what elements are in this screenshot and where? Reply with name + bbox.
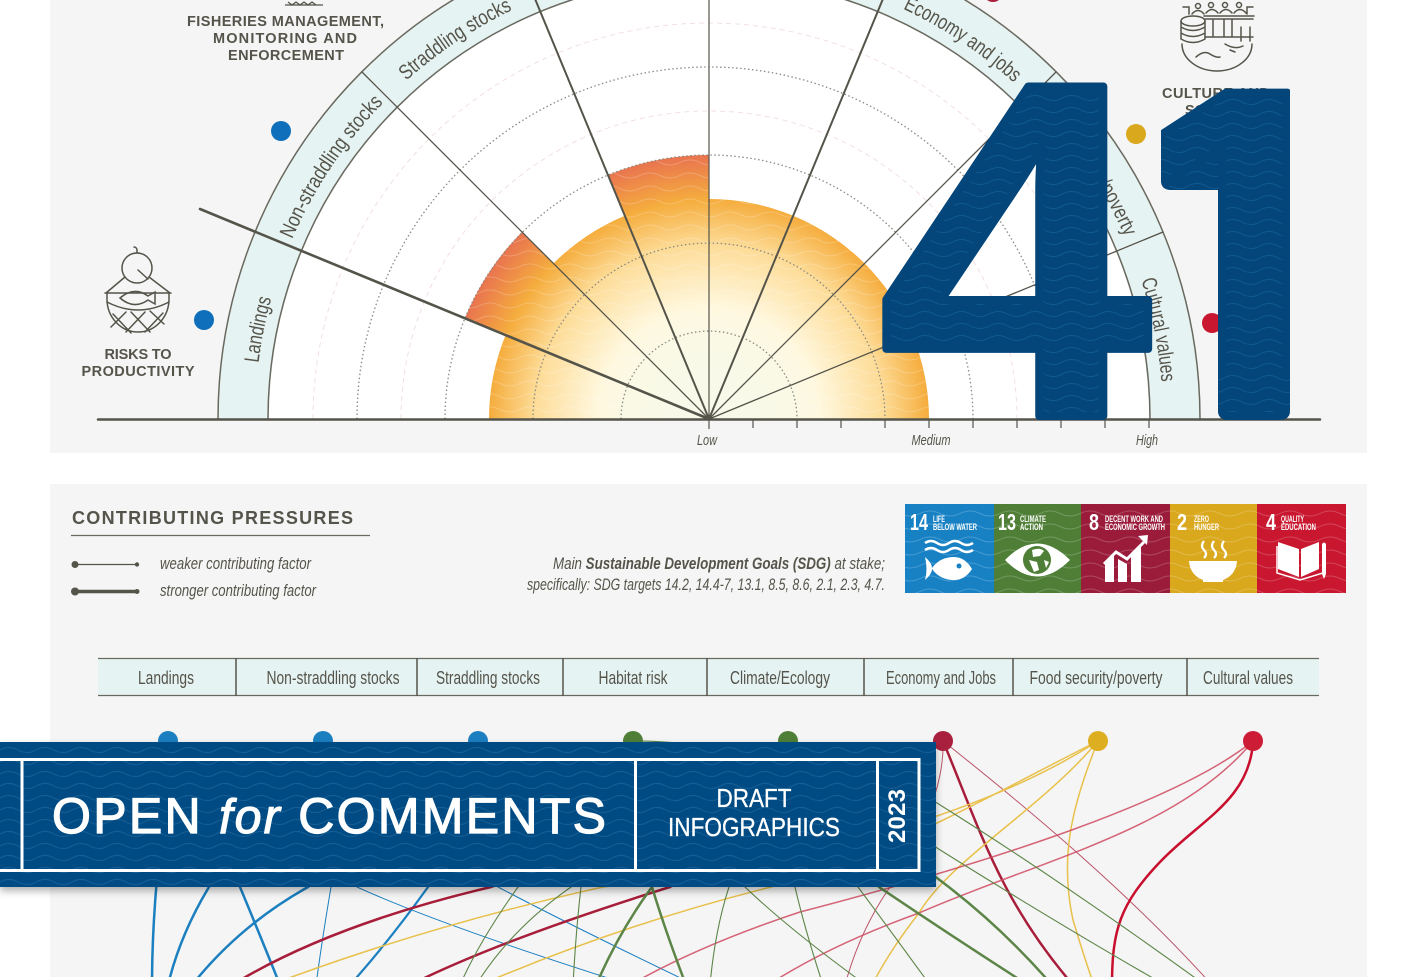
icon: risks to productivity [105, 247, 171, 333]
big number: 41 [882, 82, 1290, 420]
icon: fisheries management [285, 2, 323, 5]
table header: pressure categories: Habitat risk [598, 668, 668, 688]
heading: contributing pressures: CONTRIBUTING PRESSURES [72, 508, 353, 528]
ring labels: Landings [244, 296, 273, 362]
tile: SDG 4: QUALITY [1281, 514, 1304, 524]
axis labels: Low [697, 432, 718, 449]
tile: SDG 13: 13 [998, 509, 1016, 535]
heading: fisheries management [187, 14, 384, 64]
SDG tiles [905, 504, 1346, 593]
ring labels [244, 0, 1174, 382]
node: landings [158, 731, 178, 751]
blue links [152, 741, 695, 977]
tile: SDG 14: BELOW WATER [933, 522, 977, 532]
axis labels: High [1136, 432, 1158, 449]
spokes [200, 0, 1163, 419]
tile: SDG 2 [1170, 504, 1257, 593]
dot: cultural values [1202, 313, 1222, 333]
table header: pressure categories: Climate/Ecology [730, 668, 830, 688]
tile: SDG 4: EDUCATION [1281, 522, 1316, 532]
network lines [152, 741, 1253, 977]
heading: fisheries management: MONITORING AND [213, 31, 357, 47]
panel: risk rose chart [50, 0, 1367, 453]
banner subtitle [668, 783, 840, 842]
dot: economy [983, 0, 1003, 2]
banner subtitle: DRAFT [716, 783, 792, 813]
banner frame [0, 760, 919, 870]
tile: SDG 2: ZERO [1194, 514, 1209, 524]
tile: SDG 14: LIFE [933, 514, 945, 524]
tile: SDG 8: ECONOMIC GROWTH [1105, 522, 1165, 532]
table header: pressure categories: Non-straddling stocks [266, 668, 400, 688]
axis labels [697, 432, 1158, 449]
text: SDG note: specifically: SDG targets 14.2, 14.4-7, 13.1, 8.5, 8.6, 2.1, 2.3, 4.7. [527, 575, 885, 594]
tile: SDG 13 [994, 504, 1081, 593]
table header: pressure categories: Landings [138, 668, 194, 688]
heading: culture and society: CULTURE AND [1162, 86, 1270, 102]
text: SDG note [527, 554, 885, 594]
legend: stronger factor: stronger contributing factor [160, 581, 317, 600]
heading: risks to productivity: PRODUCTIVITY [82, 364, 195, 380]
tile: SDG 2: 2 [1177, 509, 1187, 535]
gold links [270, 741, 1098, 977]
tile: SDG 4 [1257, 504, 1346, 593]
banner title: OPEN for COMMENTS [52, 788, 606, 844]
icon: culture and society [1181, 2, 1254, 71]
big number: 41: 1 [1113, 0, 1374, 516]
node: food security [1088, 731, 1108, 751]
sun wedges [465, 155, 929, 419]
node: economy [933, 731, 953, 751]
panel: contributing pressures [50, 484, 1367, 977]
heading: culture and society [1162, 86, 1270, 119]
node: habitat risk [623, 731, 643, 751]
table header: pressure categories: Cultural values [1203, 668, 1293, 688]
heading: fisheries management: FISHERIES MANAGEMENT, [187, 14, 384, 30]
banner: open for comments [0, 742, 936, 887]
ring labels: Non-straddling stocks [280, 96, 382, 238]
table header: pressure categories: Economy and Jobs [886, 668, 996, 688]
banner year: 2023 [884, 789, 911, 843]
red links [630, 741, 1253, 977]
dot: food security [1126, 124, 1146, 144]
node: non-straddling stocks [313, 731, 333, 751]
ring labels: Food security/poverty [1107, 179, 1135, 234]
legend: stronger factor [71, 581, 317, 600]
node: climate [778, 731, 798, 751]
node: cultural values [1243, 731, 1263, 751]
green links [460, 741, 1205, 977]
maroon links [232, 741, 1212, 977]
grid arcs [313, 23, 1105, 419]
tile: SDG 8: DECENT WORK AND [1105, 514, 1163, 524]
tile: SDG 14 [905, 504, 994, 593]
axis [98, 420, 1320, 429]
tile: SDG 8 [1081, 504, 1170, 593]
heading: culture and society: SOCIETY [1185, 103, 1247, 119]
dot: landings [194, 310, 214, 330]
legend: weaker factor [72, 554, 312, 573]
tile: SDG 14: 14 [910, 509, 928, 535]
tile: SDG 2: HUNGER [1194, 522, 1219, 532]
node: straddling stocks [468, 731, 488, 751]
cultural values strong link [1112, 741, 1253, 977]
heading: risks to productivity: RISKS TO [104, 347, 172, 363]
heading: fisheries management: ENFORCEMENT [228, 48, 344, 64]
table header: pressure categories: Food security/poverty [1030, 668, 1162, 688]
ring labels: Cultural values [1142, 278, 1174, 382]
tile: SDG 13: CLIMATE [1020, 514, 1046, 524]
banner subtitle: INFOGRAPHICS [668, 812, 840, 842]
heading: risks to productivity [82, 347, 195, 380]
axis labels: Medium [912, 432, 950, 449]
tile: SDG 4: 4 [1266, 509, 1276, 535]
legend: weaker factor: weaker contributing factor [160, 554, 312, 573]
text: SDG note: Main Sustainable Development Goals (SDG) at stake; [553, 554, 885, 573]
tile: SDG 13: ACTION [1020, 522, 1043, 532]
dot: non-straddling stocks [271, 121, 291, 141]
tile: SDG 8: 8 [1089, 509, 1099, 535]
table header: pressure categories [98, 658, 1319, 696]
chart ring band [218, 0, 1200, 419]
table header: pressure categories: Straddling stocks [436, 668, 540, 688]
